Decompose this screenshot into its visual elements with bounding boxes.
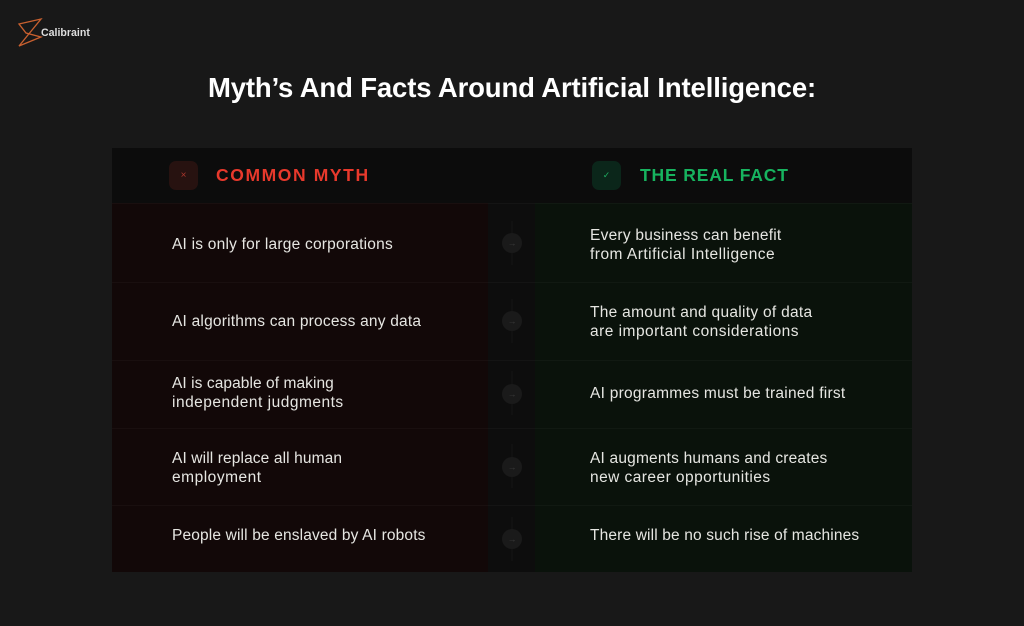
arrow 1: → — [508, 238, 516, 248]
arrow 2 — [502, 311, 522, 331]
fact 1 — [590, 227, 782, 263]
myth 3: independent judgments — [172, 394, 344, 411]
arrow 5 — [502, 529, 522, 549]
title: Myth’s And Facts Around Artificial Intelligence: — [208, 72, 816, 103]
myth 1: AI is only for large corporations — [172, 236, 393, 253]
arrow 4 — [502, 457, 522, 477]
panel: middle column background — [488, 203, 535, 572]
arrow 3 — [502, 384, 522, 404]
icon: fact check badge: ✓ — [603, 170, 610, 180]
arrow 1 — [502, 233, 522, 253]
fact 1: Every business can benefit — [590, 227, 781, 244]
fact 4: new career opportunities — [590, 469, 771, 486]
myth 5: People will be enslaved by AI robots — [172, 527, 426, 544]
fact 5: There will be no such rise of machines — [590, 527, 859, 544]
arrow 5: → — [508, 534, 516, 544]
icon: myth cross badge — [169, 161, 198, 190]
fact 2: are important considerations — [590, 323, 799, 340]
arrow 2: → — [508, 316, 516, 326]
fact 3: AI programmes must be trained first — [590, 385, 845, 402]
fact 1: from Artificial Intelligence — [590, 246, 775, 263]
fact 2 — [590, 304, 812, 340]
fact 4 — [590, 450, 827, 486]
myth 4: employment — [172, 469, 262, 486]
icon: orange Z mark — [18, 18, 43, 47]
logo: Calibraint — [18, 18, 90, 47]
logo wordmark: Calibraint — [41, 27, 90, 39]
arrow 4: → — [508, 462, 516, 472]
myth 4 — [172, 450, 342, 486]
panel: myth column background — [112, 203, 488, 572]
fact 2: The amount and quality of data — [590, 304, 812, 321]
myth 3: AI is capable of making — [172, 375, 334, 392]
myth 2: AI algorithms can process any data — [172, 313, 421, 330]
icon: myth cross badge: × — [181, 170, 186, 181]
myth 3 — [172, 375, 344, 411]
comparison table — [112, 148, 912, 572]
icon: fact check badge — [592, 161, 621, 190]
myth 4: AI will replace all human — [172, 450, 342, 467]
heading: the real fact: THE REAL FACT — [640, 165, 789, 185]
panel: fact column background — [535, 203, 912, 572]
heading: common myth: COMMON MYTH — [216, 165, 370, 185]
arrow 3: → — [508, 389, 516, 399]
fact 4: AI augments humans and creates — [590, 450, 827, 467]
